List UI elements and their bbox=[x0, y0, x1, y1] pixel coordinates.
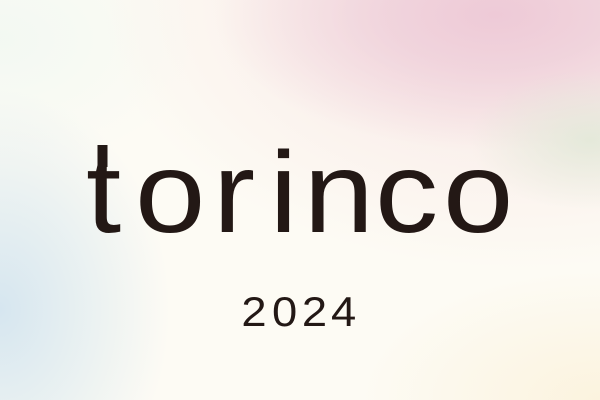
title: torinco: torinco bbox=[86, 128, 513, 257]
year: 2024: 2024 bbox=[241, 289, 356, 336]
